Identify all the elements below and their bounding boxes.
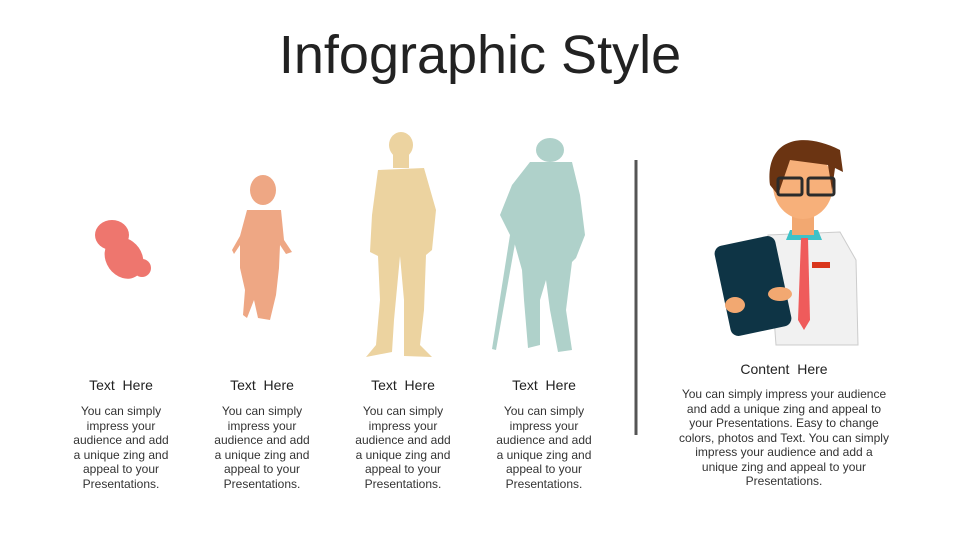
divider line [634,160,638,435]
icon: fetus [95,220,151,286]
icon: child [232,175,292,320]
text: You can simply impress your audience and add a unique zing and appeal to your Presentations. [355,404,451,491]
content heading: Content Here [740,361,828,377]
icon: adult [366,132,436,357]
text: You can simply impress your audience and add a unique zing and appeal to your Presentations. [73,404,169,491]
title: Infographic Style [279,25,681,85]
text: You can simply impress your audience and add a unique zing and appeal to your Presentations. [214,404,310,491]
column 1: Text Here [89,377,153,393]
content text: You can simply impress your audience and add a unique zing and appeal to your Presentations. Easy to change colors, photos and Text. You can simply impress your audience and add a unique zing and appeal to your Presentations. [679,387,889,488]
icon: elderly with cane [492,138,585,352]
column 3: Text Here [371,377,435,393]
column 4: Text Here [512,377,576,393]
column 2: Text Here [230,377,294,393]
text: You can simply impress your audience and add a unique zing and appeal to your Presentations. [496,404,592,491]
icon: doctor [713,140,858,345]
